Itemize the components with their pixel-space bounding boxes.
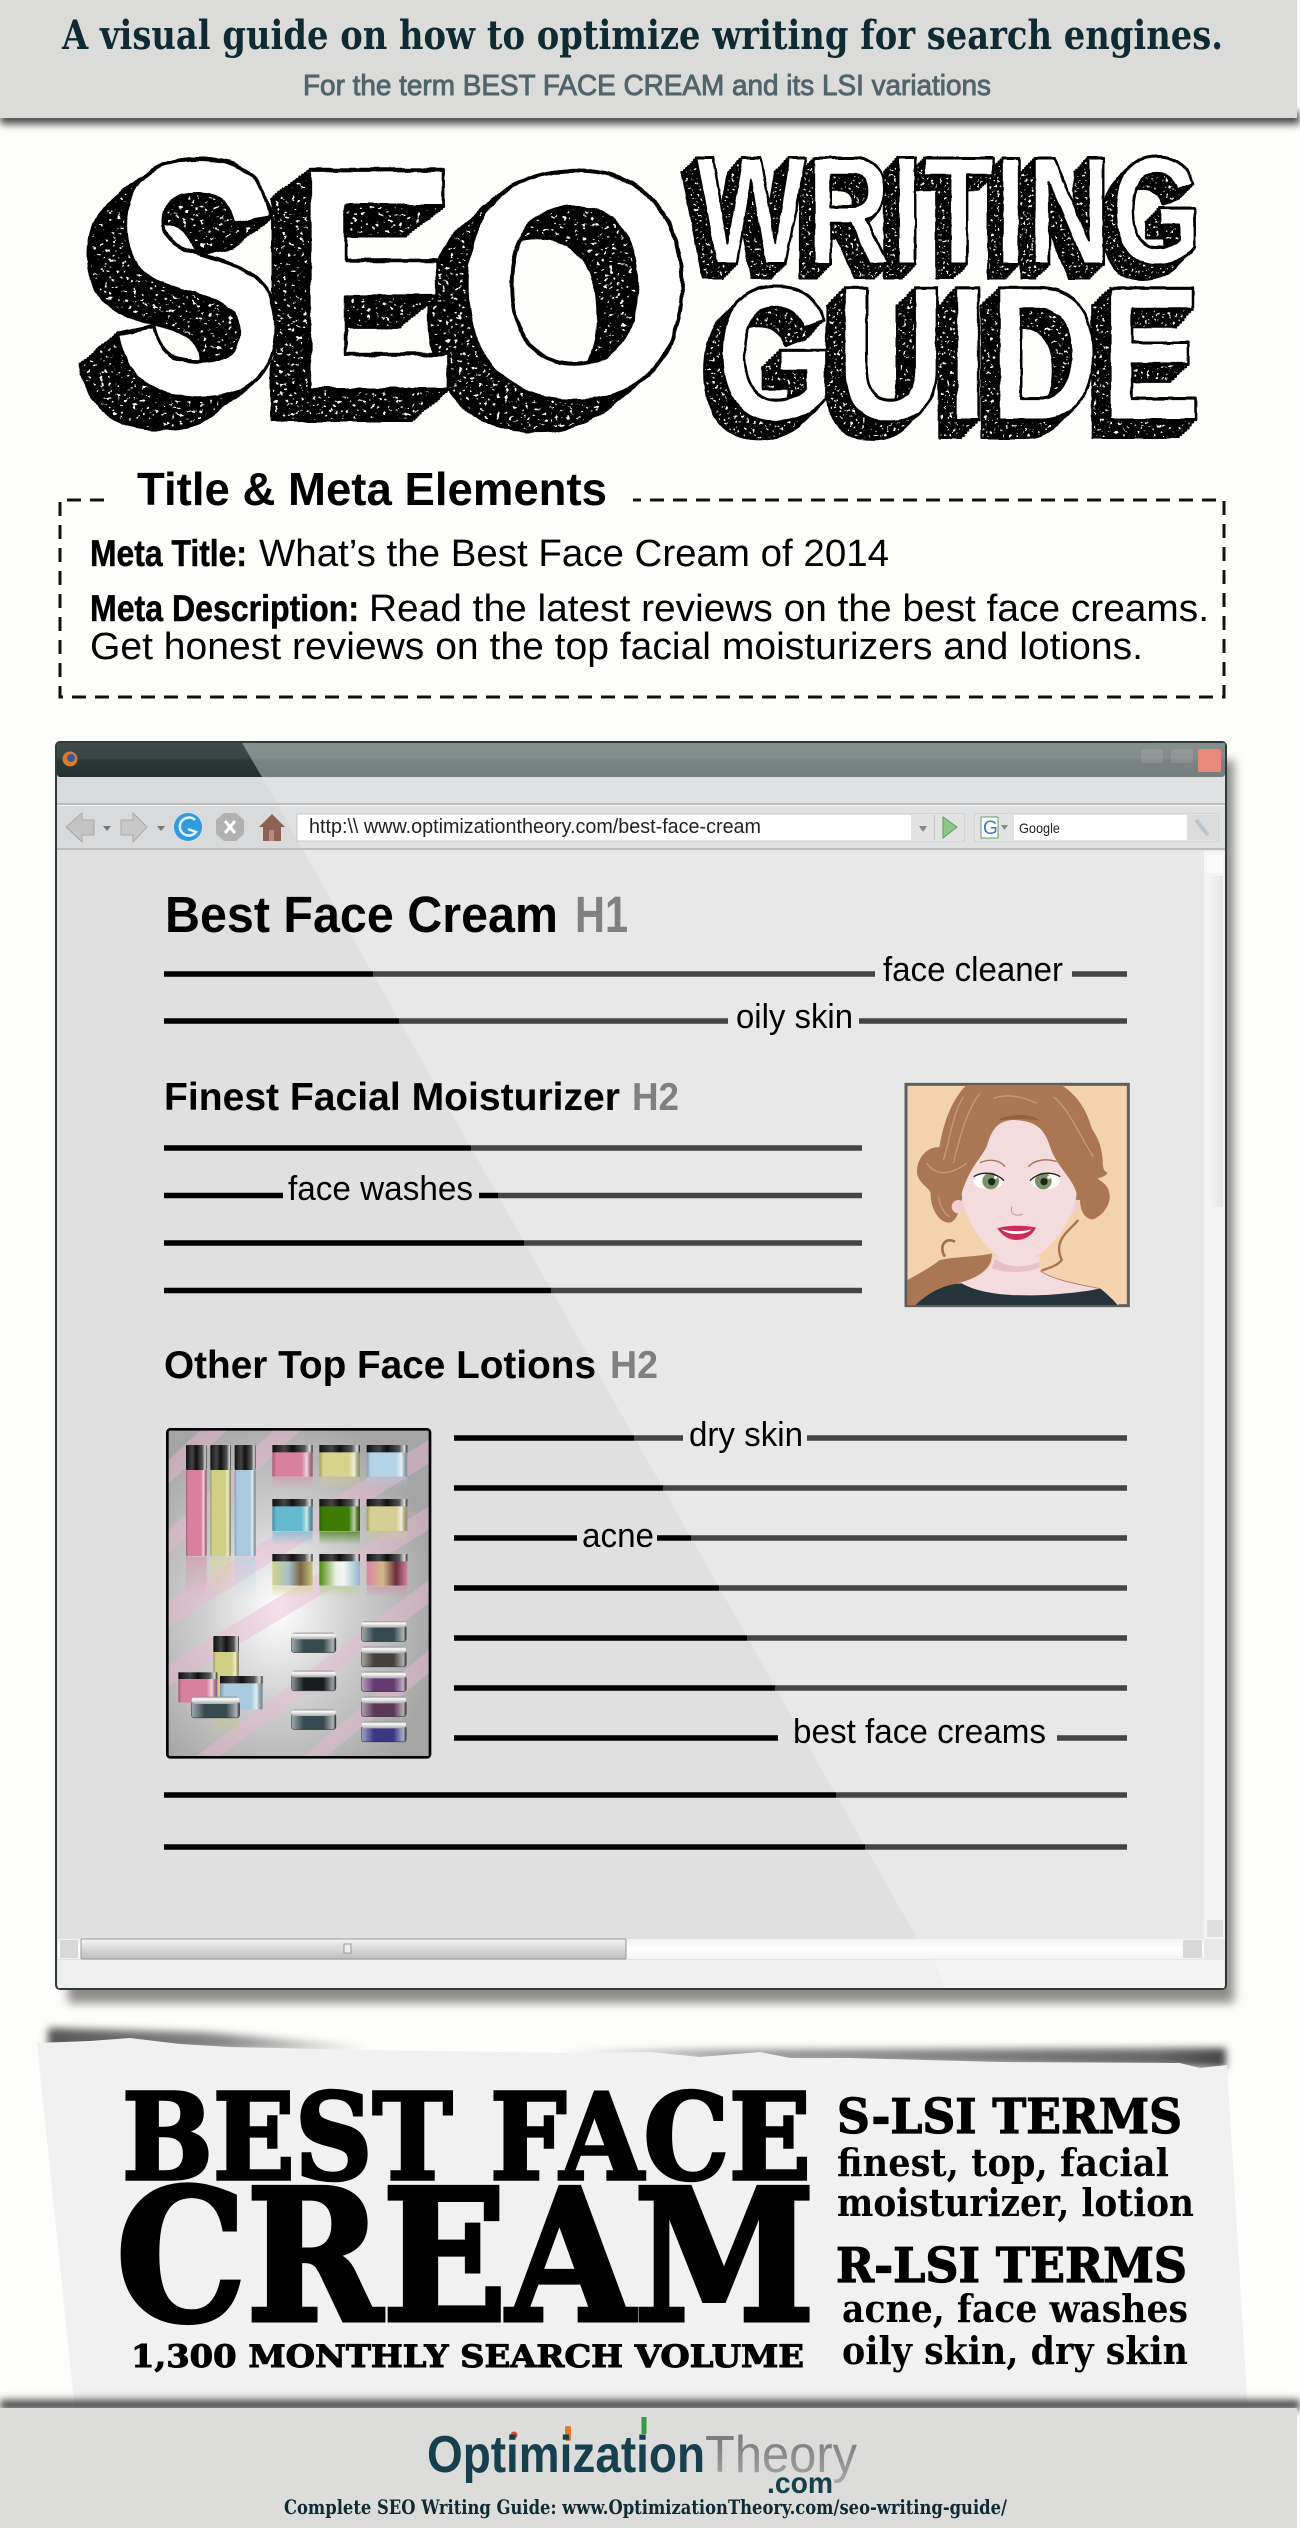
heading: first H2: Finest Facial Moisturizer xyxy=(164,1076,620,1119)
title: SEO: S xyxy=(110,91,286,467)
title: SEO: E xyxy=(293,100,458,458)
logo wordmark light: Theory xyxy=(705,2426,857,2484)
meta title value: What’s the Best Face Cream of 2014 xyxy=(259,533,889,575)
icon: back arrow xyxy=(66,813,94,842)
logo xyxy=(427,2417,857,2500)
header subtitle: For the term BEST FACE CREAM and its LSI variations xyxy=(303,70,991,102)
icon: forward arrow xyxy=(121,813,147,842)
logo bars xyxy=(510,2417,646,2441)
keyword: face cleaner: face cleaner xyxy=(883,951,1063,989)
R-LSI terms line one: acne, face washes xyxy=(842,2286,1188,2331)
keyword: acne: acne xyxy=(582,1517,654,1555)
meta description label: Meta Description: xyxy=(90,588,359,629)
title: SEO: O xyxy=(454,104,695,468)
keyword: dry skin: dry skin xyxy=(689,1416,803,1454)
search volume: 1,300 MONTHLY SEARCH VOLUME xyxy=(131,2339,804,2375)
keyword: best face creams: best face creams xyxy=(793,1713,1046,1751)
meta description line one: Read the latest reviews on the best face creams. xyxy=(369,588,1209,630)
heading: second H2: Other Top Face Lotions xyxy=(164,1344,596,1387)
footer band xyxy=(0,2400,1300,2528)
panel: torn paper keyword card xyxy=(37,2028,1248,2412)
address bar xyxy=(297,814,964,841)
browser title bar xyxy=(57,743,1225,777)
S-LSI heading: S-LSI TERMS xyxy=(837,2089,1182,2145)
keyword: CREAM: CREAM xyxy=(116,2149,815,2363)
title: SEO xyxy=(110,91,695,468)
R-LSI heading: R-LSI TERMS xyxy=(836,2238,1187,2294)
keyword: oily skin: oily skin xyxy=(736,998,853,1036)
search engine glyph: G xyxy=(983,818,998,839)
icon: browser logo xyxy=(62,752,78,766)
header band xyxy=(0,0,1300,124)
jar rows xyxy=(272,1445,407,1597)
meta title label: Meta Title: xyxy=(90,533,247,574)
image: woman portrait xyxy=(906,1083,1128,1306)
panel: title and meta elements xyxy=(60,463,1224,697)
content gloss overlay xyxy=(303,850,1225,1988)
address url: http:\\ www.optimizationtheory.com/best-face-cream xyxy=(309,816,761,838)
horizontal scrollbar xyxy=(58,1939,1204,1959)
heading: H1: Best Face Cream xyxy=(165,886,558,943)
keyword: BEST FACE: BEST FACE xyxy=(122,2068,811,2208)
footer link: Complete SEO Writing Guide: www.OptimizationTheory.com/seo-writing-guide/ xyxy=(284,2495,1008,2519)
logo domain: .com xyxy=(767,2467,833,2500)
window buttons xyxy=(1141,749,1221,772)
page text lines xyxy=(164,974,1127,1847)
icon: stop xyxy=(216,813,244,841)
dark compact jars xyxy=(292,1621,406,1742)
search bar xyxy=(975,814,1218,841)
icon: home xyxy=(259,814,285,841)
first H2 tag: H2 xyxy=(632,1076,679,1119)
keyword: face washes: face washes xyxy=(288,1170,473,1208)
icon: reload xyxy=(174,813,202,841)
bottom-left cluster xyxy=(178,1636,263,1738)
R-LSI terms line two: oily skin, dry skin xyxy=(842,2328,1188,2373)
meta description line two: Get honest reviews on the top facial moisturizers and lotions. xyxy=(90,626,1143,668)
tall bottles xyxy=(186,1445,256,1597)
image: cosmetic jars xyxy=(167,1429,430,1757)
status bar xyxy=(58,1960,1224,1988)
meta heading: Title & Meta Elements xyxy=(137,463,607,515)
H1 tag: H1 xyxy=(575,886,628,943)
second H2 tag: H2 xyxy=(610,1344,658,1387)
S-LSI terms line two: moisturizer, lotion xyxy=(837,2180,1194,2225)
vertical scrollbar xyxy=(1204,851,1225,1939)
icon: dropdowns xyxy=(103,826,165,831)
logo wordmark bold: Optimization xyxy=(427,2426,705,2484)
search field text: Google xyxy=(1019,820,1060,836)
browser toolbar xyxy=(57,777,1225,850)
panel: browser window xyxy=(0,742,1300,2528)
S-LSI terms line one: finest, top, facial xyxy=(837,2140,1169,2185)
